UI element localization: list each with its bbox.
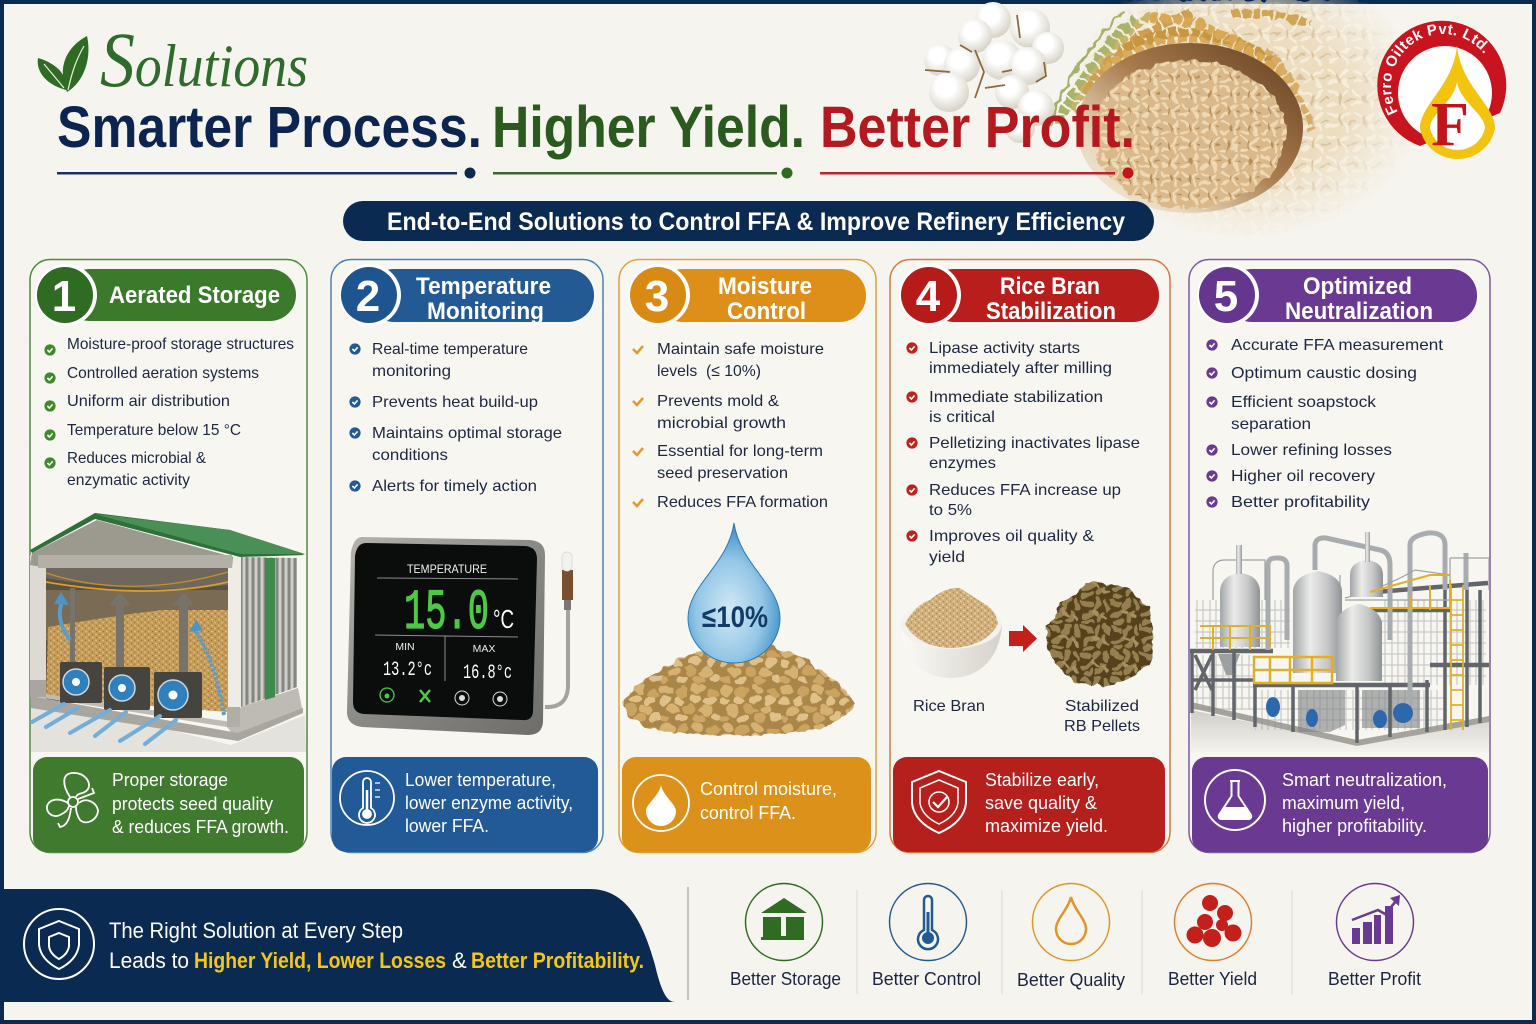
- panel 5 bullets: Lower refining losses: [1231, 442, 1392, 459]
- panel 4 frame: [890, 260, 1170, 852]
- fan units: [60, 662, 202, 718]
- product labels: RB Pellets: [1064, 718, 1140, 735]
- panel 4 header: [899, 264, 1159, 326]
- left post: [30, 555, 46, 697]
- panel 2 frame: [331, 260, 603, 852]
- panel 5 callout: maximum yield,: [1282, 793, 1405, 813]
- panel 3 bullets: levels (≤ 10%): [657, 363, 761, 380]
- subtitle banner: [343, 201, 1154, 241]
- title underlines: [57, 168, 1134, 178]
- panel 4 bullets: Improves oil quality &: [929, 528, 1094, 545]
- panel 4 callout: [893, 757, 1165, 852]
- logo letter F: F: [1431, 91, 1469, 159]
- panel 2 bullets: [349, 341, 562, 495]
- display readings: 13.2°c: [383, 659, 432, 682]
- panel 2 bullets: monitoring: [372, 363, 451, 380]
- panel 4: rice bran stabilization: [890, 260, 1170, 852]
- illustration: stabilized pellets: [1045, 582, 1154, 686]
- panel 2 header: 2: [356, 272, 380, 321]
- panel 4 callout: Stabilize early,: [985, 770, 1099, 790]
- panel 5 bullets: separation: [1231, 416, 1311, 433]
- title: [57, 95, 1135, 160]
- icon: fan: [47, 773, 98, 827]
- intake arrows: [32, 704, 176, 744]
- panel 1 bullets: Reduces microbial &: [67, 450, 206, 467]
- concrete slab: [31, 688, 303, 741]
- panel 4 bullets: is critical: [929, 409, 995, 426]
- panel 4 callout: maximize yield.: [985, 816, 1108, 836]
- banner message: &: [452, 948, 467, 973]
- panel 1 callout: protects seed quality: [112, 794, 273, 814]
- panel 3: moisture control: [619, 260, 876, 852]
- panel 3 bullets: microbial growth: [657, 415, 786, 432]
- banner message: The Right Solution at Every Step: [109, 918, 403, 943]
- panel 5 header: Optimized: [1303, 273, 1412, 300]
- panel 4 header: Rice Bran: [1000, 273, 1100, 300]
- panel 5 bullets: Efficient soapstock: [1231, 394, 1377, 411]
- dense pipe mesh behind tanks: [1192, 600, 1486, 730]
- banner message: [109, 918, 644, 973]
- panel 1: aerated storage: [30, 260, 307, 852]
- panel 2 header: Monitoring: [427, 298, 544, 325]
- panel 1 header: 1: [52, 272, 76, 321]
- panel 3 bullets: Maintain safe moisture: [657, 341, 824, 358]
- panel 3 bullets: Essential for long-term: [657, 443, 823, 460]
- panel 4 bullets: Reduces FFA increase up: [929, 482, 1121, 499]
- subtitle banner: End-to-End Solutions to Control FFA & Improve Refinery Efficiency: [387, 208, 1125, 236]
- display readings: °C: [493, 604, 514, 634]
- banner message: Leads to: [109, 948, 189, 973]
- panel 3 header: [628, 264, 866, 326]
- device body: [347, 537, 545, 735]
- pipework: [1268, 533, 1466, 700]
- benefit: better control: [872, 884, 981, 989]
- display readings: 16.8°c: [463, 662, 512, 685]
- benefit: better storage: [730, 884, 841, 989]
- icon: leaves: [38, 36, 88, 92]
- benefit: better quality: [1017, 884, 1125, 990]
- panel 1 bullets: [44, 336, 294, 489]
- illustration: water drop: ≤10%: [702, 601, 768, 634]
- panel 3 bullets: seed preservation: [657, 465, 788, 482]
- product labels: Stabilized: [1065, 698, 1139, 715]
- display readings: TEMPERATURE: [407, 562, 487, 576]
- panel 1 callout: [33, 757, 304, 852]
- steel columns: [1190, 583, 1489, 743]
- right post: [228, 556, 241, 708]
- title: Higher Yield.: [492, 95, 805, 160]
- panel 5 callout: [1192, 757, 1488, 852]
- equipment under platform: [1298, 690, 1420, 732]
- icon: flask: [1205, 770, 1265, 830]
- display readings: MIN: [395, 641, 415, 653]
- panel 1 frame: [30, 260, 307, 852]
- benefit dividers: [687, 887, 689, 1000]
- panel 4 bullets: yield: [929, 549, 965, 566]
- wooden bowl of rice: [1077, 43, 1303, 213]
- panel 3 bullets: Reduces FFA formation: [657, 494, 828, 511]
- panel 1 header: [35, 264, 296, 326]
- pumps: [1266, 697, 1413, 728]
- grain heap: [46, 610, 228, 712]
- side wall: [241, 557, 297, 707]
- panel 2 bullets: Real-time temperature: [372, 341, 528, 358]
- panel 2 bullets: conditions: [372, 447, 448, 464]
- panel 2 callout: Lower temperature,: [405, 770, 556, 790]
- panel 1 bullets: Uniform air distribution: [67, 393, 230, 410]
- panel 3 callout: [622, 757, 871, 852]
- icon: drop: [633, 775, 689, 831]
- benefit: better profit: Better Profit: [1328, 969, 1421, 989]
- panel 2 callout: [332, 757, 598, 852]
- panel 2 bullets: Alerts for timely action: [372, 478, 537, 495]
- panel 5 header: Neutralization: [1285, 298, 1433, 325]
- illustration: digital thermometer: [347, 537, 573, 735]
- panel 4 bullets: immediately after milling: [929, 360, 1112, 377]
- benefit: better control: Better Control: [872, 969, 981, 989]
- panel 5 bullets: Better profitability: [1231, 494, 1370, 511]
- title: Better Profit.: [820, 95, 1135, 160]
- display status icons: [380, 688, 507, 706]
- panel 5 header: [1197, 264, 1477, 326]
- panel 4 bullets: to 5%: [929, 502, 972, 519]
- panel 3 callout: control FFA.: [700, 803, 796, 823]
- logo: Ferro Oiltek: [1377, 20, 1506, 159]
- barn interior: [46, 566, 230, 701]
- panel 2 header: Temperature: [416, 273, 551, 300]
- panel 2 callout: lower enzyme activity,: [405, 793, 573, 813]
- panel 4 callout: save quality &: [985, 793, 1097, 813]
- panel 2: temperature monitoring: [331, 260, 603, 852]
- display readings: MAX: [473, 643, 495, 655]
- cotton bolls: [924, 2, 1064, 143]
- panel 5 bullets: Higher oil recovery: [1231, 468, 1375, 485]
- rice ears: [1050, 12, 1312, 130]
- illustration: seed pile: [622, 645, 854, 736]
- product labels: Rice Bran: [913, 698, 985, 715]
- panel 1 bullets: enzymatic activity: [67, 472, 190, 489]
- benefit: better yield: [1168, 884, 1257, 989]
- logo oil drop: [1420, 45, 1495, 159]
- panel 3 frame: [619, 260, 876, 852]
- panel 5 bullets: Optimum caustic dosing: [1231, 365, 1417, 382]
- panel 2 callout: lower FFA.: [405, 816, 489, 836]
- panel 4 bullets: Immediate stabilization: [929, 389, 1103, 406]
- benefit: better yield: Better Yield: [1168, 969, 1257, 989]
- display readings: [375, 562, 518, 685]
- panel 3 header: 3: [645, 272, 669, 321]
- plant floor: [1191, 710, 1489, 752]
- arrow: bran to pellets: [1009, 625, 1037, 652]
- panel 5 bullets: Accurate FFA measurement: [1231, 337, 1444, 354]
- benefit: better quality: Better Quality: [1017, 970, 1125, 990]
- illustration: rice bran bowl: [900, 588, 1002, 678]
- panel 2 bullets: Maintains optimal storage: [372, 425, 562, 442]
- panel 2 header: [339, 264, 594, 326]
- benefit: better storage: Better Storage: [730, 969, 841, 989]
- gray airflow arrows: [70, 588, 194, 673]
- blue airflow arrows: [60, 602, 224, 715]
- illustration: refinery plant: [1190, 532, 1489, 752]
- panel 5 frame: [1189, 260, 1490, 852]
- panel 2 bullets: Prevents heat build-up: [372, 394, 538, 411]
- header photo: cotton and rice: [924, 0, 1430, 240]
- tanks: [1220, 532, 1383, 681]
- panel 5 callout: higher profitability.: [1282, 816, 1427, 836]
- panel 4 header: Stabilization: [986, 298, 1116, 325]
- display readings: 15.0: [404, 582, 489, 646]
- panel 5 callout: Smart neutralization,: [1282, 770, 1447, 790]
- probe cable: [545, 610, 568, 707]
- panel 1 bullets: Temperature below 15 °C: [67, 422, 241, 439]
- panel 5: optimized neutralization: [1189, 260, 1490, 852]
- banner message: Better Profitability.: [471, 948, 644, 973]
- bottom banner: [0, 889, 675, 1002]
- panel 5 header: 5: [1214, 272, 1238, 321]
- title: Smarter Process.: [57, 95, 482, 160]
- panel 3 bullets: [633, 341, 828, 511]
- gable: [30, 520, 233, 568]
- panel 4 bullets: enzymes: [929, 455, 996, 472]
- product labels: [913, 698, 1140, 735]
- panel 4 header: 4: [916, 272, 941, 321]
- panel 4 bullets: [906, 340, 1140, 566]
- panel 4 bullets: Lipase activity starts: [929, 340, 1080, 357]
- panel 1 callout: & reduces FFA growth.: [112, 817, 289, 837]
- panel 1 bullets: Controlled aeration systems: [67, 365, 259, 382]
- illustration: water drop: [688, 523, 780, 663]
- panel 1 header: Aerated Storage: [109, 282, 280, 309]
- spread of rice grains: [1078, 0, 1406, 232]
- icon: shield: [24, 909, 94, 979]
- panel 4 bullets: Pelletizing inactivates lipase: [929, 435, 1140, 452]
- panel 3 header: Moisture: [718, 273, 812, 300]
- logo name on arc: Ferro Oiltek Pvt. Ltd.: [1382, 24, 1488, 116]
- panel 1 callout: Proper storage: [112, 770, 228, 790]
- benefit: better profit: [1328, 884, 1421, 989]
- icon: thermometer: [340, 771, 394, 825]
- panel 1 bullets: Moisture-proof storage structures: [67, 336, 294, 353]
- panel 3 callout: Control moisture,: [700, 779, 837, 799]
- banner message: Higher Yield, Lower Losses: [194, 948, 446, 973]
- illustration: aerated barn: [30, 513, 306, 752]
- green roof: [30, 513, 305, 557]
- panel 3 header: Control: [727, 298, 806, 325]
- panel 3 bullets: Prevents mold &: [657, 393, 779, 410]
- icon: shield check: [912, 771, 966, 833]
- yellow railings: [1200, 575, 1463, 730]
- script heading: Solutions: Solutions: [100, 16, 308, 103]
- panel 5 bullets: [1206, 337, 1444, 511]
